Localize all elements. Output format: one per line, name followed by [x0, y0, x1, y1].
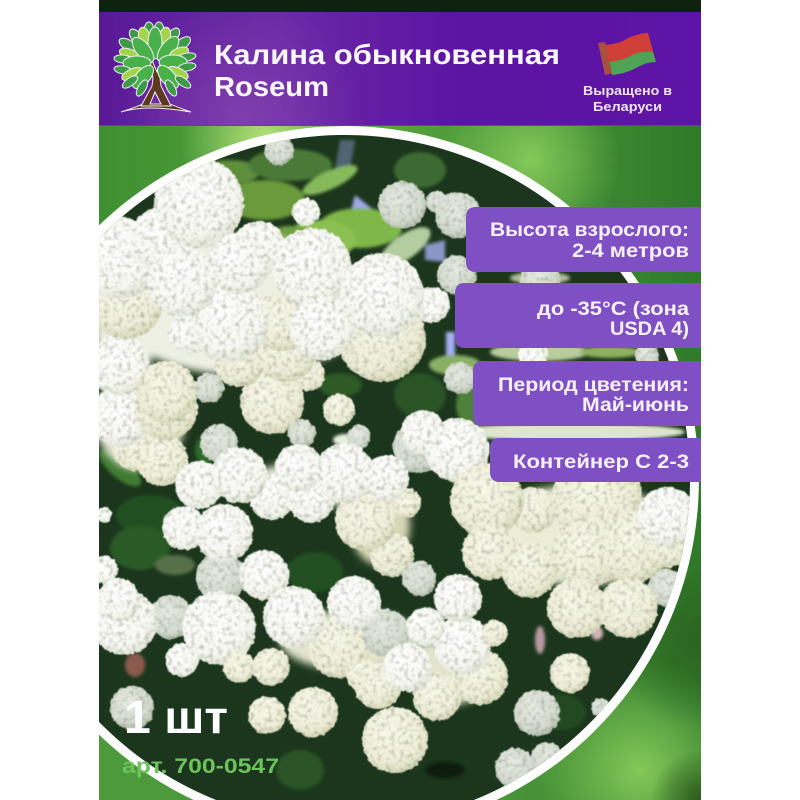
- tree roots: [121, 98, 191, 112]
- flower masses: [95, 235, 680, 705]
- label: grown in Belarus: Беларуси: [593, 100, 662, 114]
- label: grown in Belarus: [583, 84, 672, 114]
- icon: Belarus flag: [598, 33, 656, 75]
- badge: flowering period: Май-июнь: [582, 395, 689, 416]
- title: Roseum: [214, 71, 329, 102]
- title: Калина обыкновенная: [214, 39, 560, 70]
- badge: flowering period: Период цветения:: [498, 375, 689, 396]
- badge: frost hardiness: до -35°С (зона: [537, 299, 689, 320]
- header band: [99, 12, 701, 126]
- badge: container: [490, 438, 701, 482]
- photo: viburnum snowball bush: [78, 120, 701, 800]
- badge: adult height: Высота взрослого:: [490, 220, 689, 241]
- tree trunk: [141, 58, 171, 106]
- badge: frost hardiness: USDA 4): [610, 319, 689, 340]
- article number: арт. 700-0547: [122, 755, 279, 778]
- blurred green background: [99, 0, 701, 800]
- badge: adult height: 2-4 метров: [572, 241, 689, 262]
- badge: container: Контейнер С 2-3: [513, 452, 689, 473]
- quantity: 1 шт: [124, 691, 228, 743]
- tree leaves: [113, 22, 197, 98]
- snowball flowers: [78, 135, 697, 788]
- badge: frost hardiness: [455, 283, 701, 348]
- badge: adult height: [466, 207, 701, 272]
- label: grown in Belarus: Выращено в: [583, 84, 672, 98]
- logo: tree: [113, 22, 197, 112]
- foliage and sky: [94, 140, 685, 790]
- round photo frame: [99, 126, 699, 800]
- title: [214, 39, 560, 102]
- badge: flowering period: [473, 361, 701, 426]
